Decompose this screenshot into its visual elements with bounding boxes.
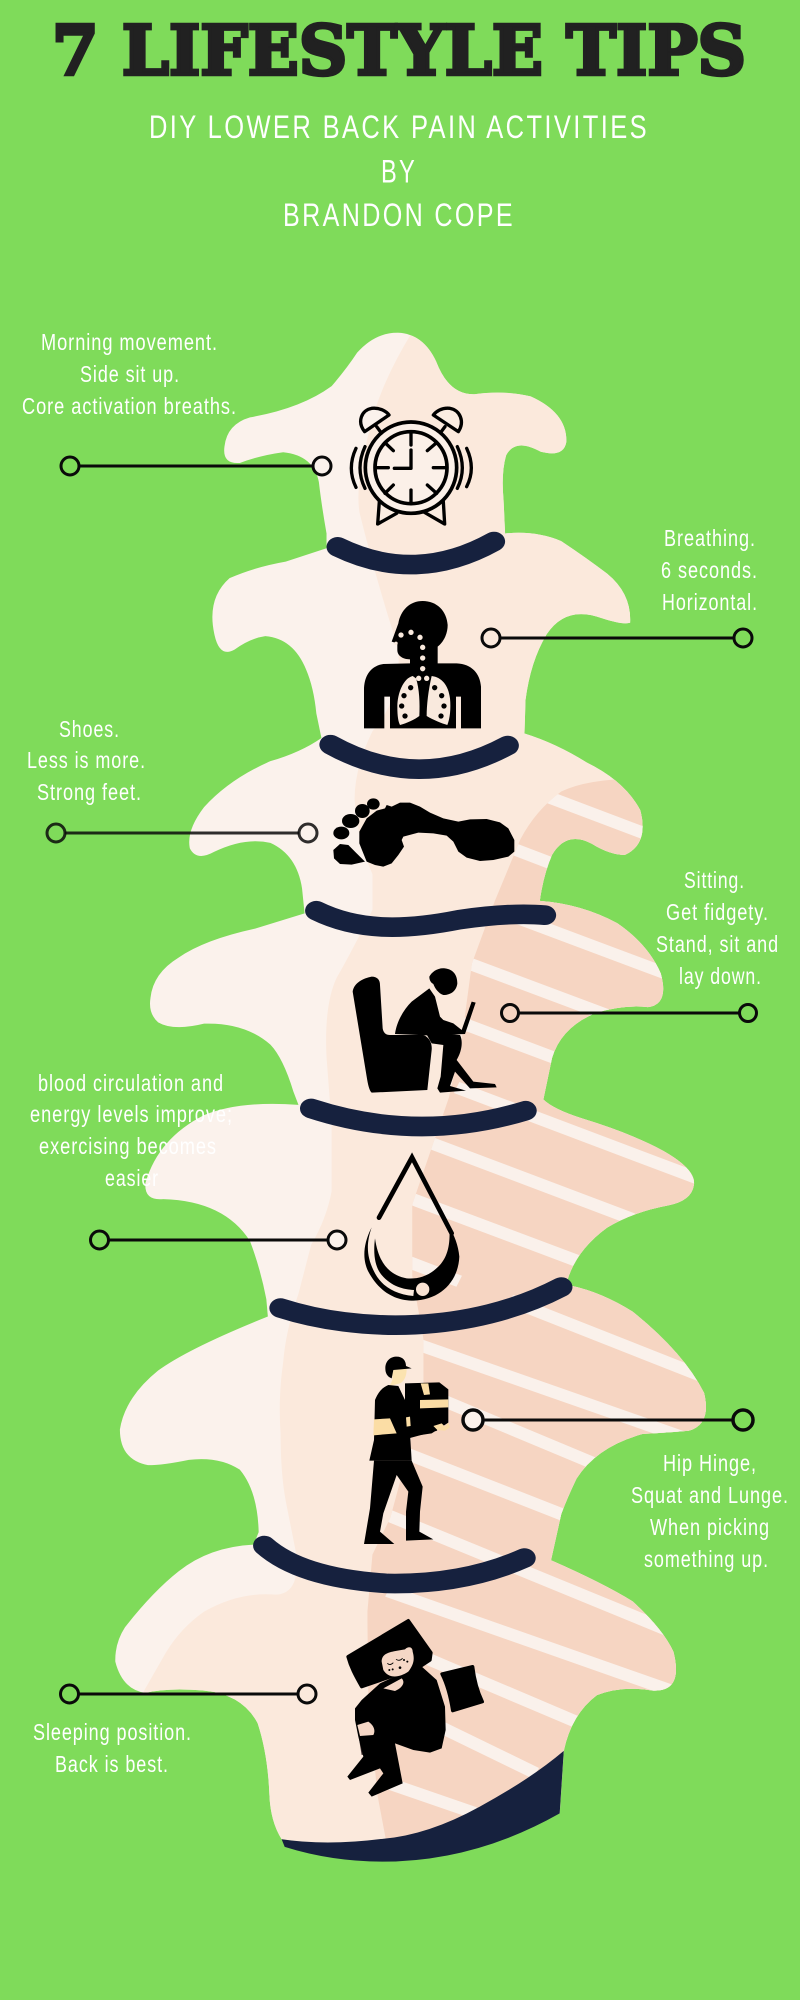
disc arcs xyxy=(264,542,561,1584)
text: breathing tip: Breathing. xyxy=(664,525,756,551)
text: circulation tip: energy levels improve; xyxy=(30,1101,233,1127)
text: sleeping tip: Back is best. xyxy=(55,1751,169,1777)
text: sitting tip: Sitting. xyxy=(684,867,745,893)
subtitle: DIY LOWER BACK PAIN ACTIVITIES xyxy=(149,109,649,145)
text: lifting tip: Hip Hinge, xyxy=(663,1450,757,1476)
icon: sleeping person xyxy=(347,1621,482,1797)
text: morning tip: Morning movement. xyxy=(41,329,218,355)
text: circulation tip xyxy=(30,1070,233,1191)
connector: hydration xyxy=(90,1231,346,1249)
icon: person sitting with laptop xyxy=(353,968,497,1093)
icon: breathing torso xyxy=(364,601,481,728)
connector: shoes xyxy=(47,824,317,842)
icon: worker carrying box xyxy=(364,1357,450,1544)
connector: lifting xyxy=(463,1410,753,1430)
text: lifting tip: something up. xyxy=(644,1546,769,1572)
text: lifting tip xyxy=(631,1450,789,1572)
text: shoes tip xyxy=(27,716,146,805)
navy base xyxy=(282,1751,564,1862)
subtitle xyxy=(149,109,649,233)
connector: sitting xyxy=(502,1004,756,1022)
panel: spine illustration xyxy=(115,332,706,1862)
subtitle: BRANDON COPE xyxy=(283,197,515,233)
icon: alarm clock xyxy=(351,408,471,524)
text: morning tip: Side sit up. xyxy=(80,361,180,387)
connector: sleeping xyxy=(60,1685,316,1703)
text: sitting tip: lay down. xyxy=(679,963,762,989)
text: lifting tip: When picking xyxy=(650,1514,770,1540)
text: circulation tip: easier xyxy=(105,1165,159,1191)
icon: water drop xyxy=(364,1157,459,1301)
title: 7 LIFESTYLE TIPS xyxy=(52,12,746,92)
text: sleeping tip xyxy=(33,1719,192,1777)
text: morning tip: Core activation breaths. xyxy=(22,393,237,419)
text: breathing tip: Horizontal. xyxy=(662,589,758,615)
text: circulation tip: blood circulation and xyxy=(38,1070,224,1096)
connector: breathing xyxy=(482,629,752,647)
text: breathing tip: 6 seconds. xyxy=(661,557,758,583)
text: circulation tip: exercising becomes xyxy=(39,1133,217,1159)
text: shoes tip: Shoes. xyxy=(59,716,120,742)
subtitle: BY xyxy=(381,154,417,190)
text: morning tip xyxy=(22,329,237,419)
connector: morning xyxy=(61,457,331,475)
icon: footprint xyxy=(333,798,514,867)
text: breathing tip xyxy=(661,525,758,615)
text: sitting tip xyxy=(656,867,779,989)
text: shoes tip: Strong feet. xyxy=(37,779,142,805)
text: sitting tip: Get fidgety. xyxy=(666,899,769,925)
text: sleeping tip: Sleeping position. xyxy=(33,1719,192,1745)
text: shoes tip: Less is more. xyxy=(27,747,146,773)
